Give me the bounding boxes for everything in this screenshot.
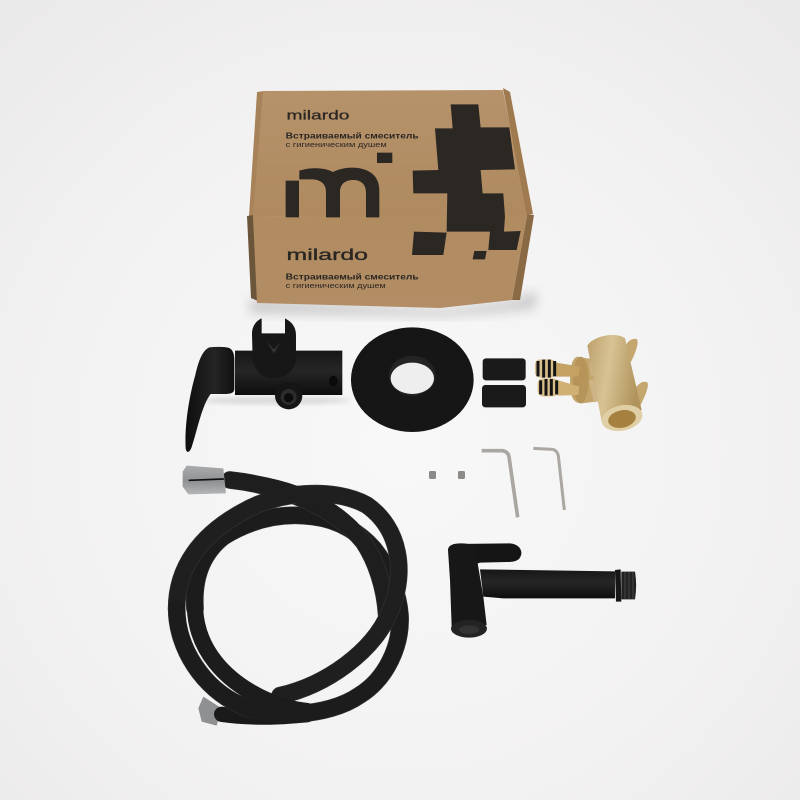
hose upper connector [183,466,226,494]
box front logo text: milardo [286,247,368,264]
lever handle [185,347,234,452]
cardboard box [247,88,534,308]
brass valve [535,335,648,435]
side ports [570,357,606,403]
hose strands [177,480,400,717]
shower head [448,543,487,627]
mounting ears [624,339,648,409]
box large m logo [286,153,392,217]
box top panel [253,90,527,217]
lower left overlaps [195,608,307,711]
hose outlet [275,382,302,409]
threaded port [599,401,645,435]
front strand [177,494,399,696]
box left flaps [247,91,264,301]
shower holder [252,318,296,378]
upper strand under [230,480,387,615]
box top logo text: milardo [286,108,350,122]
cartridge stems [535,359,580,396]
rubber sleeves [482,358,526,407]
mixer body cylinder [235,351,342,395]
box top title: Встраиваемый смеситель [286,130,419,140]
box front title: Встраиваемый смеситель [286,271,419,281]
shower trigger [453,543,521,567]
box front subtitle: с гигиеническим душем [286,281,386,290]
box top subtitle: с гигиеническим душем [286,140,387,149]
long lower and inner strand [177,515,400,714]
hose lower connector [198,697,222,726]
hand shower [448,543,636,638]
box right flaps [503,88,534,300]
connector strand [222,712,317,717]
flexible hose [177,466,400,726]
escutcheon disc [351,327,474,432]
box pixel pattern [412,104,521,259]
hex keys [482,448,564,517]
upper strand over [230,480,352,528]
set screw hole [329,376,338,386]
box shadow [250,290,535,316]
threaded connector [615,569,621,602]
box front panel [253,215,527,308]
shower barrel [480,569,615,598]
main body [587,335,642,422]
spray face [451,620,487,638]
mixer lever and body [185,318,350,452]
small screws [429,471,465,479]
